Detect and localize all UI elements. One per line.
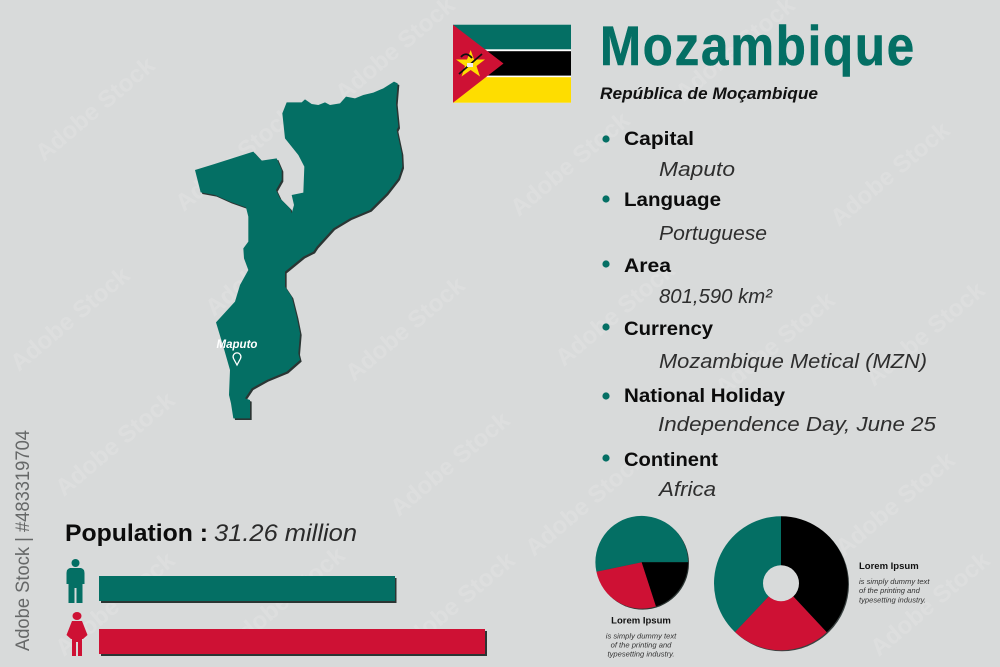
- text: Adobe Stock: [5, 261, 136, 377]
- caption: donut: [859, 561, 930, 604]
- caption: small pie: [606, 616, 677, 658]
- text: Adobe Stock: [390, 546, 521, 662]
- icon: male figure: [66, 559, 84, 603]
- fact: capital: [602, 129, 735, 181]
- fact: area: 801,590 km²: [659, 286, 773, 308]
- icon: map pin: [233, 353, 241, 365]
- caption: donut: of the printing and: [859, 586, 921, 595]
- text: Adobe Stock: [865, 546, 996, 662]
- fact: language: Portuguese: [659, 223, 767, 245]
- fact: currency: Currency: [624, 319, 713, 340]
- flag of Mozambique: [453, 25, 571, 103]
- text: Adobe Stock: [385, 406, 516, 522]
- capital label: Maputo: [217, 339, 257, 351]
- chart: donut: [714, 516, 849, 651]
- population heading: Population :: [65, 520, 208, 547]
- icon: female figure: [66, 612, 88, 656]
- caption: small pie: is simply dummy text: [606, 632, 677, 640]
- fact: capital: Maputo: [659, 159, 735, 181]
- text: Adobe Stock: [710, 286, 841, 402]
- caption: small pie: of the printing and: [611, 640, 672, 650]
- text: Adobe Stock: [825, 116, 956, 232]
- facts list: [602, 129, 937, 501]
- fact: area: [602, 256, 773, 308]
- text: Adobe Stock: [50, 386, 181, 502]
- caption: donut: typesetting industry.: [859, 596, 926, 604]
- text: Adobe Stock: [200, 206, 331, 322]
- fact: capital: Capital: [624, 129, 694, 150]
- fact: national holiday: Independence Day, June 25: [658, 414, 937, 436]
- caption: small pie: Lorem Ipsum: [611, 616, 671, 626]
- text: Adobe Stock: [830, 446, 961, 562]
- text: Adobe Stock: [505, 106, 636, 222]
- text: Adobe Stock: [30, 51, 161, 167]
- fact: currency: [602, 319, 927, 373]
- caption: small pie: typesetting industry.: [608, 650, 674, 658]
- text: Adobe Stock: [220, 541, 351, 657]
- population heading: [65, 520, 357, 547]
- fact: area: Area: [624, 256, 671, 277]
- fact: language: [602, 190, 767, 245]
- text: Adobe Stock: [520, 446, 651, 562]
- text: Adobe Stock: [50, 546, 181, 662]
- caption: donut: is simply dummy text: [859, 577, 930, 586]
- fact: continent: [602, 450, 719, 501]
- fact: language: Language: [624, 190, 721, 211]
- text: Adobe Stock: [170, 101, 301, 217]
- text: Adobe Stock: [550, 256, 681, 372]
- subtitle: República de Moçambique: [600, 85, 818, 103]
- chart: small pie: [595, 516, 689, 610]
- population heading: 31.26 million: [214, 520, 357, 547]
- map body: [195, 82, 402, 418]
- fact: national holiday: [602, 386, 937, 436]
- map shadow: [197, 83, 404, 420]
- text: Adobe Stock: [860, 276, 991, 392]
- side stock credit: Adobe Stock | #483319704: [13, 430, 34, 651]
- fact: continent: Continent: [624, 450, 719, 471]
- caption: donut: Lorem Ipsum: [859, 561, 919, 572]
- fact: continent: Africa: [658, 479, 716, 501]
- fact: national holiday: National Holiday: [624, 386, 785, 407]
- title: Mozambique: [600, 15, 914, 78]
- text: Adobe Stock: [340, 271, 471, 387]
- map of Mozambique: [195, 82, 404, 420]
- bar: female population: [99, 629, 487, 656]
- bar: male population: [99, 576, 396, 603]
- fact: currency: Mozambique Metical (MZN): [659, 351, 927, 373]
